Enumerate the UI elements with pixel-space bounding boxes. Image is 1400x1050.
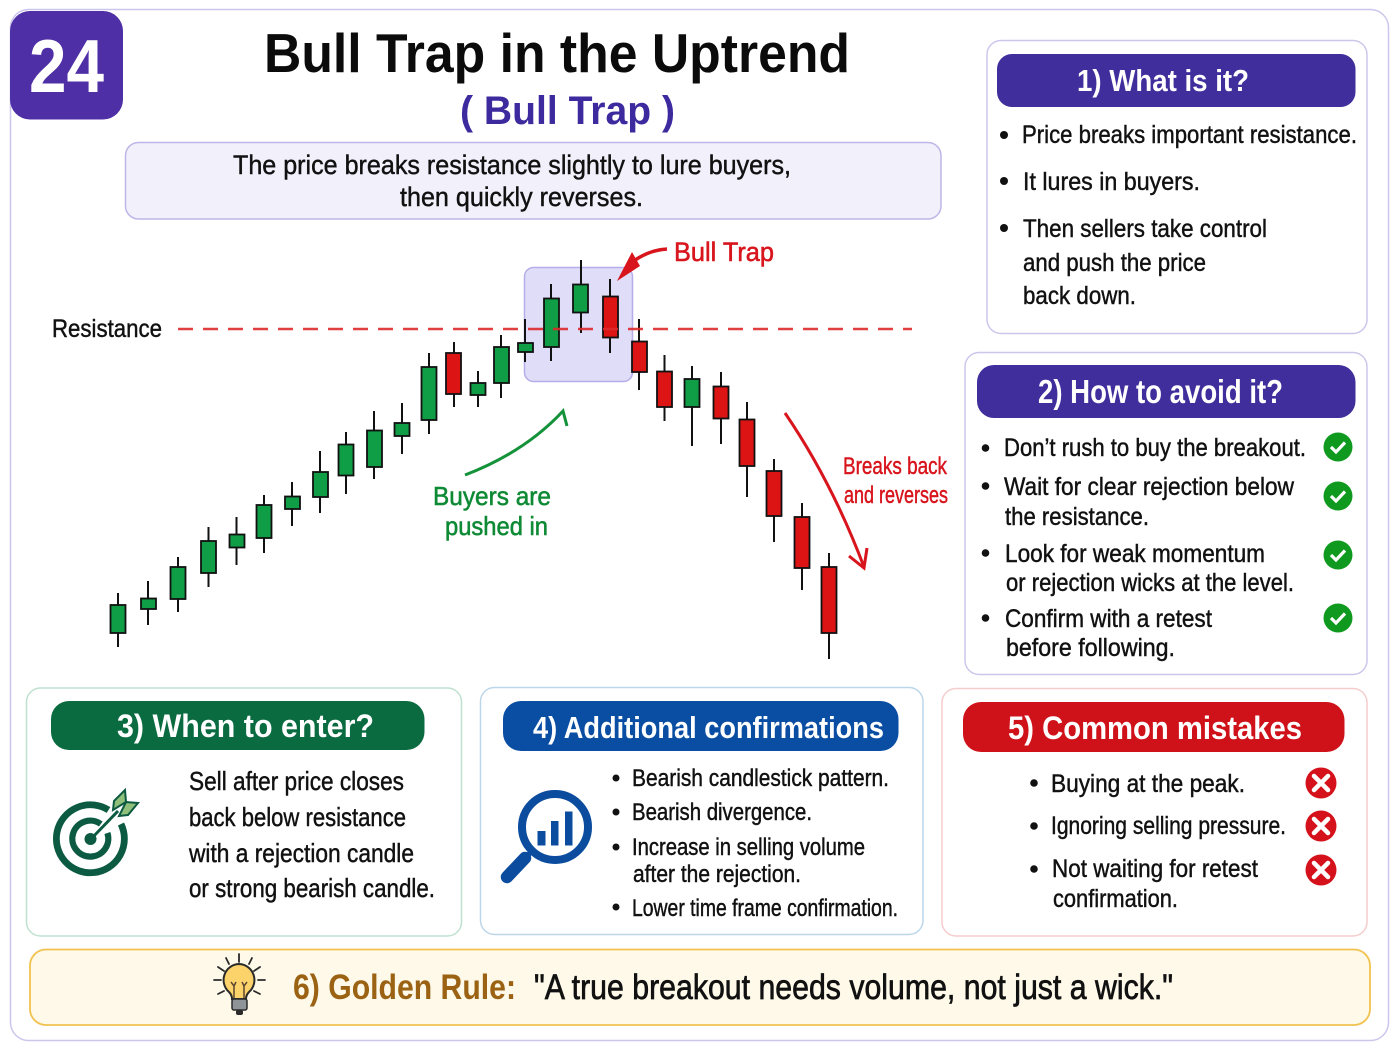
reversal label: Breaks back: [843, 453, 948, 480]
bull trap label: Bull Trap: [674, 237, 774, 267]
check icons: [1324, 432, 1352, 632]
heading: 2) How to avoid it?: [1038, 373, 1283, 410]
bullet list: Lower time frame confirmation.: [632, 895, 898, 922]
entry text: Sell after price closes: [189, 766, 404, 796]
trap highlight zone: [524, 268, 632, 382]
entry text: with a rejection candle: [188, 838, 414, 868]
resistance dashed line: [178, 328, 912, 330]
bull trap arrow: [617, 249, 667, 281]
bullet list: Then sellers take control: [1023, 215, 1267, 243]
heading: 1) What is it?: [1077, 63, 1249, 98]
definition box: then quickly reverses.: [400, 182, 643, 212]
bullet list: It lures in buyers.: [1023, 168, 1200, 196]
heading: [503, 701, 898, 751]
reversal arrow: [785, 413, 867, 568]
icon: magnifier chart: [507, 794, 588, 877]
number badge: [10, 11, 123, 120]
reversal label: and reverses: [844, 482, 948, 509]
cross icons: [1306, 768, 1336, 886]
entry text: or strong bearish candle.: [189, 873, 435, 903]
bullet list: Confirm with a retest: [1005, 605, 1212, 633]
panel: what is it: [987, 40, 1367, 334]
golden rule quote: "A true breakout needs volume, not just a wick.": [534, 968, 1173, 1007]
candlestick chart: [52, 237, 948, 659]
bullet list: before following.: [1006, 634, 1175, 662]
heading: 5) Common mistakes: [1008, 710, 1302, 746]
bullet list: [1030, 770, 1286, 913]
bullet list: Bearish candlestick pattern.: [632, 765, 889, 792]
buyers arrow: [465, 411, 567, 475]
bullet list: or rejection wicks at the level.: [1006, 569, 1294, 597]
icon: light bulb: [214, 954, 265, 1015]
title: Bull Trap in the Uptrend: [264, 22, 850, 84]
resistance label: Resistance: [52, 315, 162, 343]
bullet list: [1000, 121, 1357, 310]
icon: target: [56, 790, 138, 873]
entry text: back below resistance: [189, 802, 406, 832]
uptrend candles: [110, 319, 533, 647]
bullet list: Not waiting for retest: [1052, 855, 1258, 883]
bullet list: [612, 765, 898, 922]
definition box: The price breaks resistance slightly to lure buyers,: [233, 150, 791, 180]
bullet list: confirmation.: [1053, 885, 1178, 913]
entry text: [188, 766, 435, 903]
buyers label: pushed in: [445, 511, 548, 541]
panel: common mistakes: [942, 688, 1367, 936]
heading: [963, 702, 1344, 752]
bullet list: back down.: [1023, 282, 1136, 310]
bull trap candles: [544, 260, 618, 361]
bullet list: Bearish divergence.: [632, 799, 812, 826]
number badge: 24: [29, 24, 104, 108]
bullet list: the resistance.: [1005, 503, 1149, 531]
heading: 4) Additional confirmations: [533, 710, 884, 745]
subtitle: ( Bull Trap ): [460, 89, 675, 133]
bullet list: Wait for clear rejection below: [1004, 473, 1295, 501]
bullet list: Ignoring selling pressure.: [1051, 812, 1286, 840]
bullet list: Look for weak momentum: [1005, 540, 1265, 568]
bullet list: Price breaks important resistance.: [1022, 121, 1357, 149]
reversal label: [843, 453, 948, 509]
buyers label: [433, 481, 551, 541]
bullet list: Increase in selling volume: [632, 834, 865, 861]
heading: 3) When to enter?: [117, 708, 374, 744]
bullet list: [982, 434, 1306, 662]
buyers label: Buyers are: [433, 481, 551, 511]
heading: [997, 54, 1356, 107]
panel: how to avoid it: [965, 352, 1367, 674]
downtrend candles: [632, 319, 836, 659]
heading: [51, 701, 424, 750]
bullet list: Don’t rush to buy the breakout.: [1004, 434, 1306, 462]
bullet list: and push the price: [1023, 249, 1206, 277]
definition box: [126, 142, 941, 219]
panel: when to enter: [26, 688, 462, 936]
bullet list: after the rejection.: [633, 861, 801, 888]
bullet list: Buying at the peak.: [1051, 770, 1245, 798]
panel: golden rule: [30, 950, 1370, 1025]
golden rule label: 6) Golden Rule:: [293, 968, 516, 1007]
panel: additional confirmations: [480, 688, 923, 934]
heading: [977, 365, 1356, 418]
